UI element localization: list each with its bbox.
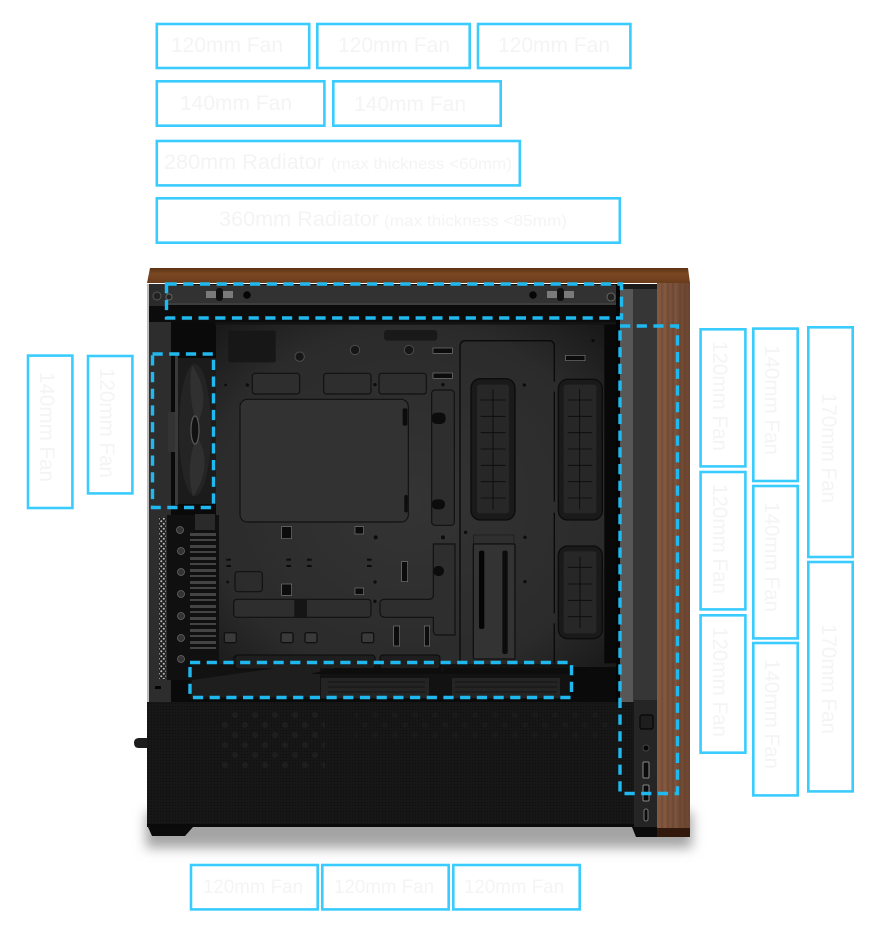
box: front 140mm fan 1 [753,329,798,481]
box: rear 140mm fan: 140mm Fan [35,372,58,482]
cable tie slots [282,348,585,646]
case shadow [146,812,692,848]
box: front 170mm fan 2 [808,562,853,791]
box: front 140mm fan 2 [753,486,798,638]
expansion slots [167,514,219,680]
box: bottom 120mm fan 1: 120mm Fan [203,877,303,898]
box: top 140mm fan 1: 140mm Fan [180,92,292,115]
small holes [224,339,595,603]
box: front 120mm fan 2 [701,472,745,609]
box: 360mm radiator: (max thickness <85mm) [384,213,567,230]
box: front 170mm fan 2: 170mm Fan [817,624,840,734]
top wiring [228,331,276,362]
top fan options row 1 [157,24,630,68]
tray cutouts [233,373,455,670]
box: rear 140mm fan [28,356,72,508]
dashed zone: front [620,326,678,794]
bottom fan options [191,865,580,909]
left case strip [147,284,171,702]
mesh bottom cover [147,702,634,827]
box: bottom 120mm fan 2: 120mm Fan [334,877,434,898]
box: top 120mm fan 1: 120mm Fan [171,34,283,57]
box: front 120mm fan 3: 120mm Fan [708,627,731,737]
box: top 120mm fan 3: 120mm Fan [498,34,610,57]
case feet [148,827,657,837]
right edge shadow [604,320,619,663]
cable grommets [471,379,602,639]
knob [134,738,147,748]
box: top 140mm fan 1 [157,81,324,126]
standoffs [295,345,414,361]
dashed zone: rear [152,354,214,508]
box: front 120mm fan 3 [701,615,745,753]
box: 280mm radiator: 280mm Radiator [164,151,324,174]
box: top 120mm fan 2 [317,24,470,68]
box: front 120mm fan 2: 120mm Fan [708,484,731,594]
box: front 140mm fan 2: 140mm Fan [760,502,783,612]
rear fan options [28,356,132,508]
wood front panel [657,283,690,837]
front fan options: 120mm column [701,329,745,753]
PSU shroud outline [460,341,554,663]
box: 360mm radiator: 360mm Radiator [219,208,379,231]
drive bracket [473,535,515,659]
box: front 120mm fan 1 [701,329,745,466]
box: rear 120mm fan: 120mm Fan [95,368,118,478]
box: bottom 120mm fan 3 [453,865,580,909]
box: front 140mm fan 1: 140mm Fan [760,345,783,455]
box: 360mm radiator [157,198,620,243]
box: front 170mm fan 1 [808,327,853,557]
clips [224,633,374,643]
PC case [134,268,690,837]
box: top 120mm fan 3 [478,24,630,68]
box: 280mm radiator [157,141,520,185]
front I/O panel [634,700,657,828]
top fan options row 2 [157,81,501,126]
front frame strip [616,284,657,702]
box: front 120mm fan 1: 120mm Fan [708,341,731,451]
front fan options: 170mm column [808,327,853,791]
dashed zone: top [166,284,622,318]
box: top 140mm fan 2: 140mm Fan [354,93,466,116]
box: front 140mm fan 3: 140mm Fan [760,659,783,769]
rear fan [168,354,216,506]
box: top 140mm fan 2 [333,81,501,126]
front fan options: 140mm column [753,329,798,795]
dashed zone: bottom [190,662,572,698]
box: 280mm radiator: (max thickness <60mm) [331,156,512,173]
box: bottom 120mm fan 1 [191,865,318,909]
top bracket [149,284,629,322]
box: front 140mm fan 3 [753,643,798,795]
box: front 170mm fan 1: 170mm Fan [817,393,840,503]
box: bottom 120mm fan 3: 120mm Fan [464,877,564,898]
motherboard tray details [215,320,619,670]
wood top panel [147,268,690,283]
box: top 120mm fan 2: 120mm Fan [338,34,450,57]
case interior panel [147,284,637,704]
box: rear 120mm fan [88,356,132,493]
box: top 120mm fan 1 [157,24,309,68]
bottom fans [190,655,570,699]
box: bottom 120mm fan 2 [322,865,449,909]
